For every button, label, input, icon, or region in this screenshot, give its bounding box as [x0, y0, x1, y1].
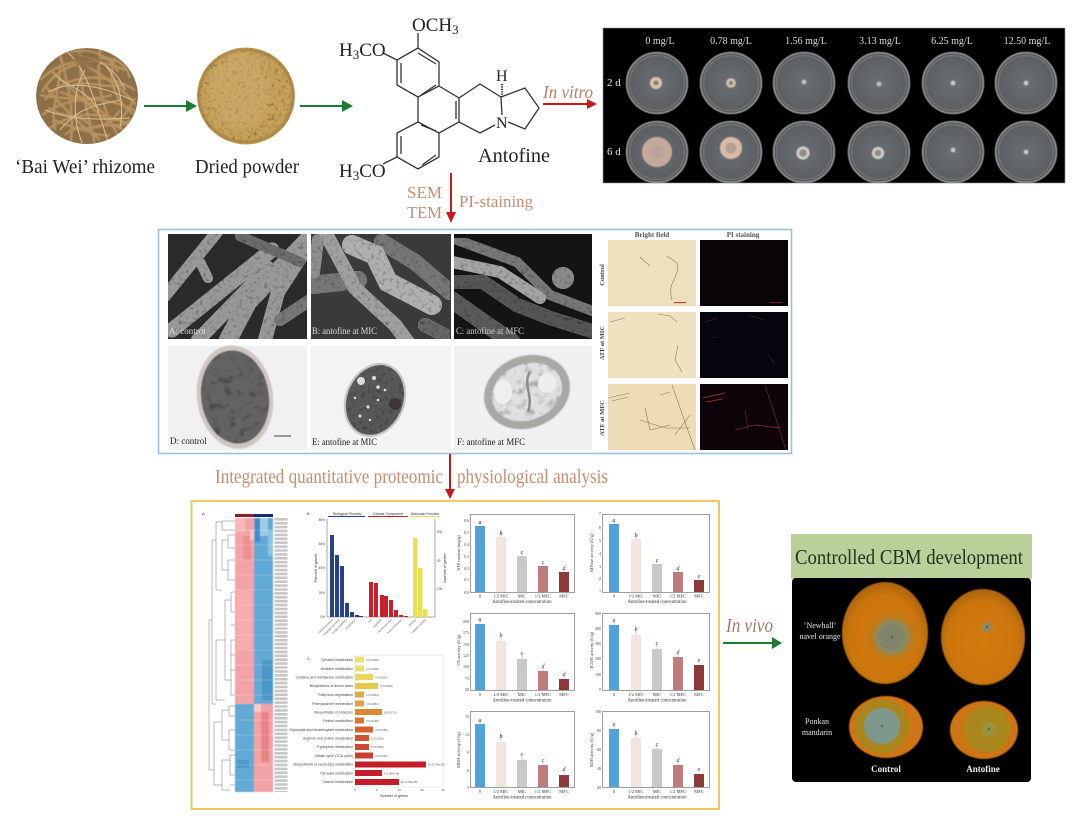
bar chart: CS activity: c: [521, 651, 524, 657]
bar chart: ATP content: 0.6: [464, 518, 469, 523]
bar chart: ATPase activity: 1/2 MIC: [628, 594, 644, 598]
chemical structure: antofine: H: [339, 161, 353, 182]
bar chart: IDH activity: MIC: [653, 692, 661, 697]
bar chart: CS activity: 1/2 MFC: [535, 692, 551, 697]
heatmap: A: [202, 511, 205, 516]
image: SEM antofine at MFC: [452, 234, 595, 342]
label: Antofine: Antofine: [966, 764, 1000, 774]
bar chart: SDH activity: MFC: [694, 789, 704, 794]
chart: KEGG pathways: Number of genes: [380, 794, 408, 798]
bar chart: MDH activity: b: [500, 734, 502, 740]
bar chart: SDH activity: c: [656, 742, 659, 748]
chart: KEGG pathways: 10: [397, 788, 401, 792]
chart: GO enrichment: 50: [437, 559, 441, 563]
bar chart: ATPase activity: MIC: [653, 594, 661, 598]
bar chart: ATPase activity: c: [656, 558, 659, 564]
chart: KEGG pathways: Histidine metabolism: [321, 667, 353, 671]
panel: microscopy: [158, 230, 792, 454]
bar chart: CS activity: 125: [463, 653, 469, 658]
bar chart: SDH activity: 80: [597, 728, 601, 733]
bar chart: MDH activity: [456, 712, 574, 800]
bar chart: IDH activity: 500: [595, 611, 601, 616]
chart: KEGG pathways: Cysteine and methionine metabolism: [296, 676, 353, 680]
label: Newhall navel orange: [799, 621, 841, 641]
bar chart: SDH activity: 20: [597, 785, 601, 790]
caption: D control: D: control: [170, 436, 207, 446]
bar chart: SDH activity: 40: [597, 766, 601, 771]
chemical structure: antofine: CO: [359, 161, 386, 182]
chart: GO enrichment: 500: [437, 530, 443, 534]
bar chart: MDH activity: c: [542, 758, 545, 764]
label: integrated analysis, left: Integrated quantitative proteomic: [215, 466, 443, 488]
arrow: to in vitro panel: [543, 99, 597, 109]
chart: KEGG pathways: 6 (2.88e-04): [384, 772, 399, 776]
bar chart: IDH activity: 1/2 MFC: [670, 692, 686, 697]
bar chart: ATPase activity: 7: [599, 511, 601, 516]
chemical structure: antofine: 3: [353, 47, 359, 62]
chart: KEGG pathways: [289, 655, 445, 798]
bar chart: ATP content: [456, 514, 574, 605]
chart: KEGG pathways: Phenylalanine metabolism: [312, 702, 353, 706]
panel: fruit in vivo: [792, 578, 1031, 782]
panel: in vitro petri dishes: 2 d: [607, 77, 621, 89]
chart: GO enrichment: Cellular Component: [373, 512, 403, 516]
panel: in vitro petri dishes: 0 mg/L: [645, 36, 675, 47]
label: Newhall navel orange: navel orange: [799, 632, 841, 641]
chemical structure: antofine: H: [339, 40, 353, 61]
bar chart: MDH activity: 6: [467, 768, 469, 773]
label: Antofine: Antofine: [478, 145, 550, 167]
arrow: proteomic to physiological: [445, 454, 455, 499]
bar chart: MDH activity: MIC: [518, 789, 526, 794]
bar chart: ATPase activity: 2: [599, 576, 601, 581]
bar chart: ATP content: d: [562, 566, 566, 572]
chart: GO enrichment: 0%: [320, 615, 325, 619]
bar chart: ATPase activity: 1/2 MFC: [670, 594, 686, 598]
chart: GO enrichment: cellular process: [317, 617, 334, 634]
bar chart: IDH activity: 300: [595, 641, 601, 646]
chemical structure: antofine: OCH: [412, 15, 452, 36]
chart: KEGG pathways: 16 (3.78e-05): [428, 762, 445, 766]
chemical structure: antofine: CO: [359, 40, 386, 61]
chart: KEGG pathways: Tryptophan metabolism: [317, 745, 353, 749]
label: Bai Wei rhizome: ‘Bai Wei’ rhizome: [15, 156, 155, 178]
chart: GO enrichment: localization: [344, 618, 357, 630]
bar chart: CS activity: CS activity (U/g): [456, 634, 461, 666]
heading: PI staining: PI staining: [727, 231, 760, 239]
bar chart: SDH activity: 1/2 MIC: [628, 789, 644, 794]
bar chart: ATPase activity: b: [634, 533, 638, 539]
chart: GO enrichment: 40%: [319, 566, 325, 570]
bar chart: CS activity: MIC: [518, 692, 526, 697]
bar chart: MDH activity: 9: [467, 750, 469, 755]
bar chart: IDH activity: ICDH activity (U/g): [589, 631, 594, 668]
caption: F antofine at MFC: F: antofine at MFC: [457, 437, 525, 447]
bar chart: SDH activity: Antofine-treated concentration: [627, 796, 687, 800]
fruit: navel orange control: [842, 582, 928, 684]
chart: KEGG pathways: Glyoxylate and dicarboxylate metabolism: [289, 728, 353, 732]
chart: KEGG pathways: 4 (0.0030): [375, 754, 388, 758]
bar chart: ATP content: 0.4: [464, 542, 469, 547]
bar chart: SDH activity: SDH activity (U/g): [589, 732, 594, 767]
arrow: to in vivo panel: [723, 637, 782, 649]
bar chart: CS activity: 75: [465, 676, 469, 681]
bar chart: IDH activity: 400: [595, 626, 601, 631]
bar chart: IDH activity: 200: [595, 656, 601, 661]
label: Ponkan mandarin: [802, 717, 832, 737]
chart: KEGG pathways: 5 (0.0054): [380, 684, 393, 688]
dishes row: 6 d: [626, 122, 1056, 182]
chart: KEGG pathways: Biosynthesis of cofactors: [314, 710, 353, 714]
chart: GO enrichment: macromolecular: [386, 618, 403, 635]
chart: KEGG pathways: 0: [354, 788, 356, 792]
bar chart: ATPase activity: Antofine-treated concentration: [627, 600, 687, 605]
arrow: powder to antofine: [300, 100, 353, 112]
panel: in vitro petri dishes: 6.25 mg/L: [931, 36, 973, 47]
panel: in vitro petri dishes: 1.56 mg/L: [785, 36, 827, 47]
chart: GO enrichment: catalytic activity: [410, 617, 427, 634]
chemical structure: antofine: N: [496, 115, 508, 132]
panel: proteomic and physiological analysis: [192, 501, 719, 809]
dishes row: 2 d: [626, 52, 1056, 114]
chart: KEGG pathways: Fatty acid degradation: [318, 693, 353, 697]
bar chart: SDH activity: 60: [597, 747, 601, 752]
chart: KEGG pathways: 15: [420, 788, 424, 792]
bar chart: MDH activity: 3: [467, 785, 469, 790]
fruit: ponkan control: [849, 696, 923, 758]
image: TEM control: [168, 340, 307, 454]
label: integrated analysis, right: physiological analysis: [457, 466, 608, 488]
bar chart: ATP content: 0.0: [464, 590, 469, 595]
row labels: Control: [599, 264, 606, 286]
bar chart: MDH activity: c: [521, 752, 524, 758]
bar chart: ATP content: Antofine-treated concentration: [492, 600, 552, 605]
bar chart: CS activity: MFC: [559, 692, 569, 697]
arrow: rhizome to powder: [144, 100, 197, 112]
label: Newhall navel orange: ‘Newhall’: [804, 621, 836, 630]
chart: KEGG pathways: 2 (0.0054): [366, 702, 379, 706]
chart: KEGG pathways: 3 (0.0090): [371, 745, 384, 749]
chart: KEGG pathways: 2 (0.0054): [366, 693, 379, 697]
bar chart: ATP content: MIC: [518, 594, 526, 598]
bar chart: CS activity: 50: [465, 687, 469, 692]
label: In vivo: In vivo: [725, 615, 773, 637]
bar chart: ATPase activity: 3: [599, 564, 601, 569]
chemical structure: antofine: 3: [353, 168, 359, 183]
icon: Bai Wei rhizome photo: [36, 48, 138, 146]
bar chart: ATP content: c: [542, 560, 545, 566]
chart: KEGG pathways: 2 (0.0048): [366, 667, 379, 671]
bar chart: SDH activity: MIC: [653, 789, 661, 794]
icon: dried powder photo: [197, 48, 295, 144]
bar chart: IDH activity: 1/2 MIC: [628, 692, 644, 697]
bar chart: SDH activity: 1/2 MFC: [670, 789, 686, 794]
bar chart: IDH activity: [589, 611, 710, 704]
bar chart: IDH activity: b: [634, 627, 638, 633]
bar chart: MDH activity: 12: [465, 732, 469, 737]
chart: KEGG pathways: Pyruvate metabolism: [320, 772, 353, 776]
chart: GO enrichment: cell: [367, 618, 373, 624]
bar chart: ATP content: 0.5: [464, 530, 469, 535]
bar chart: ATP content: 0.1: [464, 577, 469, 582]
bar chart: ATPase activity: MFC: [694, 594, 704, 598]
chart: KEGG pathways: Citrate cycle (TCA cycle): [315, 754, 353, 758]
bar chart: ATPase activity: 1: [599, 588, 601, 593]
bar chart: CS activity: Antofine-treated concentration: [492, 698, 552, 704]
panel: in vitro petri dishes: 6 d: [607, 146, 621, 158]
images: bright field: [608, 240, 696, 450]
image: SEM control: [165, 232, 310, 340]
chart: KEGG pathways: Biosynthesis of amino acids: [310, 684, 353, 688]
heading: Controlled CBM development: Controlled CBM development: [795, 545, 1023, 569]
chart: KEGG pathways: 2 (0.0190): [366, 719, 379, 723]
bar chart: CS activity: [456, 614, 574, 704]
row labels: ATF at MIC: [599, 326, 606, 360]
chart: GO enrichment: single-organism: [331, 617, 348, 635]
image: TEM antofine at MFC: [454, 342, 592, 450]
chart: GO enrichment: Percent of genes: [314, 554, 318, 582]
chart: KEGG pathways: Retinol metabolism: [323, 719, 353, 723]
chemical structure: antofine: 3: [452, 22, 459, 37]
label: Control: Control: [871, 764, 901, 774]
caption: A control: A: control: [169, 326, 206, 336]
bar chart: ATP content: MFC: [559, 594, 569, 598]
fruit: ponkan antofine: [950, 701, 1018, 759]
bar chart: MDH activity: 0: [479, 789, 482, 794]
chart: KEGG pathways: 3 (0.0130): [371, 736, 384, 740]
heading: Controlled CBM development: [791, 534, 1032, 579]
bar chart: CS activity: 1/2 MIC: [493, 692, 509, 697]
label: Ponkan mandarin: Ponkan: [805, 717, 829, 726]
image: SEM antofine at MIC: [311, 232, 451, 345]
chart: GO enrichment: 60%: [319, 542, 325, 546]
bar chart: ATPase activity: d: [676, 566, 680, 572]
bar chart: ATP content: ATP content (mg/g): [456, 535, 461, 571]
bar chart: MDH activity: Antofine-treated concentration: [492, 796, 552, 800]
row labels: [599, 264, 606, 436]
label: SEM TEM: TEM: [407, 203, 442, 222]
chart: KEGG pathways: 4 (0.0150): [375, 728, 388, 732]
panel: in vitro petri dishes: 0.78 mg/L: [710, 36, 752, 47]
image: TEM antofine at MIC: [311, 346, 451, 450]
bar chart: IDH activity: 100: [595, 672, 601, 677]
chemical structure: antofine: [339, 15, 539, 183]
bar chart: CS activity: d: [542, 664, 546, 670]
bar chart: MDH activity: a: [478, 718, 482, 724]
arrow: antofine to microscopy: [446, 173, 456, 223]
chart: GO enrichment: membrane part: [376, 618, 393, 634]
bar chart: ATPase activity: 5: [599, 538, 601, 543]
bar chart: ATPase activity: ATPase activity (U/g): [589, 533, 594, 573]
chart: KEGG pathways: Tyrosine metabolism: [321, 658, 353, 662]
bar chart: ATP content: 0.3: [464, 554, 469, 559]
bar chart: MDH activity: d: [562, 767, 566, 773]
bar chart: ATP content: 0.2: [464, 566, 469, 571]
chart: KEGG pathways: C: [307, 656, 310, 661]
bar chart: IDH activity: Antofine-treated concentration: [627, 698, 687, 704]
bar chart: SDH activity: b: [634, 731, 638, 737]
bar chart: ATP content: 1/2 MFC: [535, 594, 551, 598]
bar chart: CS activity: 175: [463, 630, 469, 635]
label: PI-staining: PI-staining: [459, 192, 533, 211]
heading: Bright field: Bright field: [635, 231, 669, 239]
bar chart: CS activity: 0: [479, 692, 482, 697]
chemical structure: antofine: H: [496, 68, 508, 85]
bar chart: CS activity: 150: [463, 642, 469, 647]
chart: KEGG pathways: Biosynthesis of secondary metabolites: [293, 762, 353, 766]
chart: KEGG pathways: 2 (0.0048): [366, 658, 379, 662]
chart: GO enrichment: metabolic process: [322, 617, 341, 637]
bar chart: MDH activity: 1/2 MFC: [535, 789, 551, 794]
chart: KEGG pathways: Carbon metabolism: [323, 780, 353, 784]
heatmap: [202, 511, 281, 792]
panel: in vitro petri dishes: 3.13 mg/L: [859, 36, 901, 47]
chart: KEGG pathways: 4 (0.0051): [375, 676, 388, 680]
bar chart: MDH activity: MFC: [559, 789, 569, 794]
chart: KEGG pathways: 6 (0.0170): [384, 710, 397, 714]
bar chart: IDH activity: c: [656, 641, 659, 647]
chart: GO enrichment: 80%: [319, 518, 325, 522]
chart: KEGG pathways: 20: [441, 788, 445, 792]
panel: in vitro petri dishes: [603, 28, 1065, 183]
bar chart: SDH activity: [589, 709, 710, 800]
chart: KEGG pathways: Arginine and proline metabolism: [303, 736, 353, 740]
bar chart: MDH activity: MDH activity (U/g): [456, 732, 461, 768]
bar chart: SDH activity: e: [698, 767, 701, 773]
chart: GO enrichment: [307, 511, 447, 637]
bar chart: SDH activity: d: [676, 758, 680, 764]
chart: GO enrichment: 20%: [319, 591, 325, 595]
bar chart: CS activity: d: [562, 672, 566, 678]
chart: GO enrichment: B: [307, 511, 310, 516]
bar chart: ATPase activity: a: [612, 518, 616, 524]
caption: B antofine at MIC: B: antofine at MIC: [312, 326, 377, 336]
panel: in vitro petri dishes: 12.50 mg/L: [1004, 36, 1050, 47]
fruit: navel orange antofine: [941, 589, 1025, 685]
label: In vitro: In vitro: [542, 82, 593, 102]
chart: KEGG pathways: 5: [376, 788, 378, 792]
bar chart: ATPase activity: [589, 511, 710, 605]
bar chart: IDH activity: 0: [599, 687, 601, 692]
chart: GO enrichment: organelle: [372, 618, 383, 629]
row labels: ATF at MFC: [599, 400, 606, 436]
images: PI staining: [700, 240, 788, 450]
bar chart: ATP content: 1/2 MIC: [493, 594, 509, 598]
bar chart: ATP content: 0: [479, 594, 482, 598]
chart: KEGG pathways: 10 (1.56e-05): [401, 780, 418, 784]
bar chart: IDH activity: 0: [613, 692, 616, 697]
label: SEM TEM: SEM: [407, 183, 442, 202]
bar chart: IDH activity: a: [612, 618, 616, 624]
bar chart: IDH activity: d: [676, 650, 680, 656]
bar chart: IDH activity: e: [698, 658, 701, 664]
chart: GO enrichment: Molecular Function: [411, 512, 439, 516]
bar chart: SDH activity: 100: [595, 709, 601, 714]
bar chart: CS activity: b: [500, 633, 502, 639]
bar chart: ATP content: b: [500, 531, 502, 537]
bar chart: SDH activity: a: [612, 722, 616, 728]
chart: GO enrichment: 100: [437, 587, 443, 591]
bar chart: MDH activity: 1/2 MIC: [493, 789, 509, 794]
bar chart: CS activity: a: [478, 617, 482, 623]
chart: GO enrichment: Biological Process: [333, 512, 361, 516]
label: Dried powder: Dried powder: [195, 156, 299, 178]
bar chart: ATP content: c: [521, 550, 524, 556]
chart: GO enrichment: binding: [407, 618, 417, 627]
bar chart: MDH activity: 15: [465, 714, 469, 719]
bar chart: IDH activity: MFC: [694, 692, 704, 697]
bar chart: ATPase activity: 0: [613, 594, 616, 598]
bar chart: CS activity: 100: [463, 664, 469, 669]
bar chart: ATP content: a: [478, 520, 482, 526]
caption: C antofine at MFC: C: antofine at MFC: [456, 326, 524, 336]
bar chart: ATPase activity: 6: [599, 525, 601, 530]
bar chart: ATPase activity: 4: [599, 551, 601, 556]
label: SEM TEM: [407, 183, 442, 222]
label: Ponkan mandarin: mandarin: [802, 728, 832, 737]
bar chart: CS activity: 200: [463, 619, 469, 624]
chart: GO enrichment: Number of genes: [443, 553, 447, 583]
bar chart: SDH activity: 0: [613, 789, 616, 794]
bar chart: ATPase activity: e: [698, 574, 701, 580]
caption: E antofine at MIC: E: antofine at MIC: [312, 437, 377, 447]
